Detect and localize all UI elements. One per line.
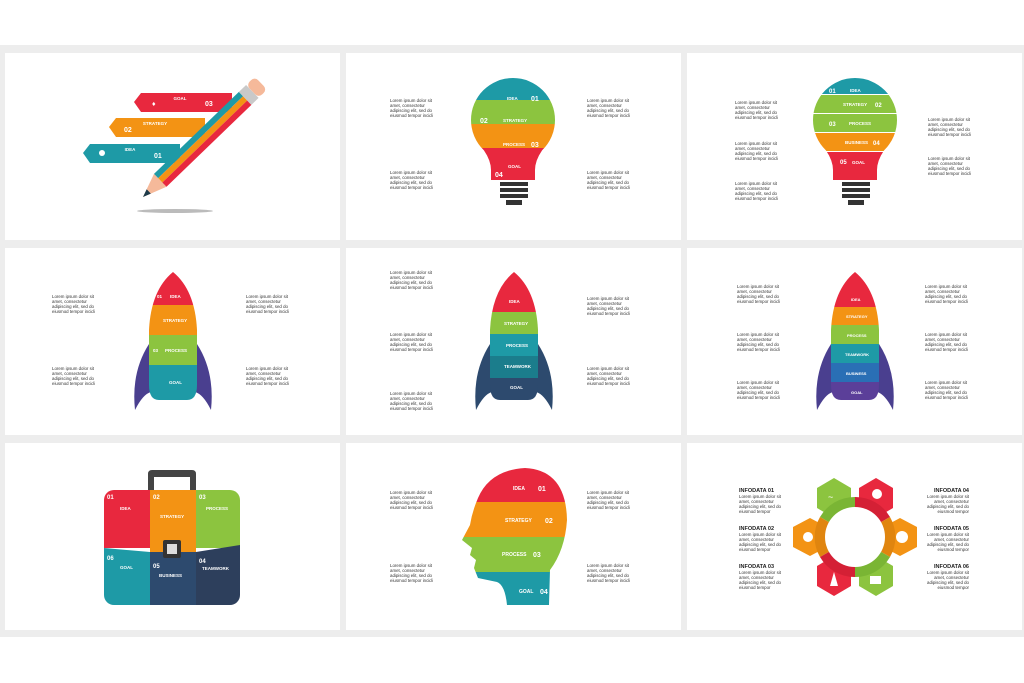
panel: gear: Lorem ipsum dolor sit <box>927 494 969 499</box>
panel: gear: amet, consectetur <box>934 575 970 580</box>
panel: rocket 4: amet, consectetur <box>246 371 281 376</box>
panel: rocket 6: adipiscing elit, sed do <box>925 390 968 395</box>
head: STRATEGY <box>505 518 533 524</box>
rocket: PROCESS <box>165 348 187 353</box>
panel: rocket 4: eiusmod tempor incidi <box>52 309 95 314</box>
panel: rocket 6: Lorem ipsum dolor sit <box>925 284 967 289</box>
panel: head: Lorem ipsum dolor sit <box>390 490 432 495</box>
bulb: 02 <box>480 118 488 125</box>
panel: head: Lorem ipsum dolor sit <box>587 563 629 568</box>
briefcase: 05 <box>153 564 160 570</box>
panel: rocket 5: adipiscing elit, sed do <box>390 342 433 347</box>
briefcase: 01 <box>107 495 114 501</box>
panel: rocket 4: amet, consectetur <box>52 299 87 304</box>
rocket: STRATEGY <box>846 314 868 319</box>
text blocks: amet, consectetur <box>587 103 622 108</box>
panel: head: eiusmod tempor incidi <box>390 578 433 583</box>
bulb: 05 <box>840 160 847 166</box>
panel: gear: INFODATA 04 <box>934 488 970 494</box>
panel: rocket 6: Lorem ipsum dolor sit <box>925 332 967 337</box>
panel: rocket 4: adipiscing elit, sed do <box>52 376 95 381</box>
head: PROCESS <box>502 552 527 558</box>
panel: rocket 5: amet, consectetur <box>587 301 622 306</box>
panel: rocket 6: amet, consectetur <box>737 337 772 342</box>
rocket: PROCESS <box>506 343 528 348</box>
text blocks: amet, consectetur <box>735 105 770 110</box>
text blocks: adipiscing elit, sed do <box>390 108 433 113</box>
panel: rocket 6: amet, consectetur <box>925 289 960 294</box>
panel: gear: eiusmod tempor <box>739 509 771 514</box>
rocket: STRATEGY <box>163 318 187 323</box>
briefcase: GOAL <box>120 565 133 570</box>
panel: rocket 6: adipiscing elit, sed do <box>737 390 780 395</box>
panel: gear: INFODATA 06 <box>934 564 969 570</box>
rocket: TEAMWORK <box>504 364 532 369</box>
rocket <box>816 272 894 410</box>
panel: gear: adipiscing elit, sed do <box>927 542 970 547</box>
panel: gear: eiusmod tempor <box>938 585 970 590</box>
panel: rocket 5: amet, consectetur <box>390 275 425 280</box>
panel: gear: INFODATA 05 <box>934 526 969 532</box>
panel: rocket 5: amet, consectetur <box>587 371 622 376</box>
text blocks <box>390 98 630 190</box>
panel: gear: INFODATA 02 <box>739 526 774 532</box>
text blocks: adipiscing elit, sed do <box>735 151 778 156</box>
panel: head: adipiscing elit, sed do <box>390 573 433 578</box>
panel: gear: amet, consectetur <box>739 575 774 580</box>
briefcase: 04 <box>199 559 206 565</box>
panel: rocket 4: Lorem ipsum dolor sit <box>52 366 94 371</box>
panel: head: eiusmod tempor incidi <box>587 505 630 510</box>
panel: gear: Lorem ipsum dolor sit <box>739 494 781 499</box>
panel: rocket 6: amet, consectetur <box>925 337 960 342</box>
panel: rocket 5: adipiscing elit, sed do <box>390 401 433 406</box>
head: GOAL <box>519 589 533 595</box>
rocket: GOAL <box>169 380 182 385</box>
bulb: GOAL <box>508 164 521 169</box>
briefcase: 03 <box>199 495 206 501</box>
panel: pencil <box>5 53 340 240</box>
panel: gear: Lorem ipsum dolor sit <box>739 570 781 575</box>
panel: rocket 6: adipiscing elit, sed do <box>737 294 780 299</box>
rocket: IDEA <box>509 299 521 304</box>
panel: rocket 5: Lorem ipsum dolor sit <box>390 332 432 337</box>
head: 02 <box>545 518 553 525</box>
panel: rocket 6: Lorem ipsum dolor sit <box>737 380 779 385</box>
panel: rocket 6: amet, consectetur <box>737 385 772 390</box>
text blocks: amet, consectetur <box>587 175 622 180</box>
panel: rocket 6: Lorem ipsum dolor sit <box>925 380 967 385</box>
bulb: 01 <box>829 89 836 95</box>
panel: gear <box>687 443 1022 630</box>
panel: gear: INFODATA 01 <box>739 488 774 494</box>
text blocks: amet, consectetur <box>390 103 425 108</box>
panel: gear: adipiscing elit, sed do <box>739 504 782 509</box>
bulb: 04 <box>873 141 880 147</box>
panel: gear: eiusmod tempor <box>938 509 970 514</box>
text blocks: eiusmod tempor incidi <box>390 185 433 190</box>
banner: strategy: 02 <box>124 127 132 134</box>
panel: gear: Lorem ipsum dolor sit <box>927 532 969 537</box>
bulb: GOAL <box>852 160 865 165</box>
panel: rocket 4: adipiscing elit, sed do <box>246 304 289 309</box>
briefcase: STRATEGY <box>160 514 184 519</box>
panel: rocket 6: adipiscing elit, sed do <box>925 342 968 347</box>
text blocks: eiusmod tempor incidi <box>587 185 630 190</box>
banner: goal: ♦ <box>152 101 156 108</box>
panel: rocket 5: Lorem ipsum dolor sit <box>390 391 432 396</box>
briefcase: 06 <box>107 556 114 562</box>
panel: rocket 4: eiusmod tempor incidi <box>246 381 289 386</box>
panel: rocket 6: amet, consectetur <box>737 289 772 294</box>
panel: gear: amet, consectetur <box>739 499 774 504</box>
text blocks: Lorem ipsum dolor sit <box>735 100 777 105</box>
panel: gear: amet, consectetur <box>934 499 970 504</box>
bulb: BUSINESS <box>845 140 868 145</box>
panel: rocket 5: amet, consectetur <box>390 396 425 401</box>
gear: ~ <box>828 492 833 502</box>
text blocks: Lorem ipsum dolor sit <box>390 170 432 175</box>
panel: rocket 4 <box>5 248 340 435</box>
panel: rocket 6: eiusmod tempor incidi <box>737 299 780 304</box>
panel: rocket 5: adipiscing elit, sed do <box>390 280 433 285</box>
panel: rocket 6: Lorem ipsum dolor sit <box>737 284 779 289</box>
panel: rocket 5: eiusmod tempor incidi <box>390 285 433 290</box>
panel: rocket 5: adipiscing elit, sed do <box>587 306 630 311</box>
rocket: IDEA <box>851 297 861 302</box>
bulb: 01 <box>531 96 539 103</box>
panel: rocket 5: eiusmod tempor incidi <box>390 347 433 352</box>
panel: rocket 5: eiusmod tempor incidi <box>587 311 630 316</box>
panel: bulb 5 <box>687 53 1022 240</box>
text blocks: adipiscing elit, sed do <box>587 180 630 185</box>
text blocks: Lorem ipsum dolor sit <box>390 98 432 103</box>
text blocks: Lorem ipsum dolor sit <box>735 181 777 186</box>
panel: bulb 4 <box>346 53 681 240</box>
text blocks: Lorem ipsum dolor sit <box>587 170 629 175</box>
bulb: 04 <box>495 172 503 179</box>
text blocks: Lorem ipsum dolor sit <box>928 117 970 122</box>
rocket: STRATEGY <box>504 321 528 326</box>
briefcase: IDEA <box>120 506 132 511</box>
panel: rocket 4: Lorem ipsum dolor sit <box>246 294 288 299</box>
pencil <box>137 77 267 203</box>
head: 04 <box>540 589 548 596</box>
head: 01 <box>538 486 546 493</box>
text blocks: Lorem ipsum dolor sit <box>587 98 629 103</box>
rocket: BUSINESS <box>846 371 867 376</box>
bulb: 02 <box>875 103 882 109</box>
panel: gear: Lorem ipsum dolor sit <box>739 532 781 537</box>
panel: head: adipiscing elit, sed do <box>587 573 630 578</box>
panel: rocket 6: adipiscing elit, sed do <box>925 294 968 299</box>
rocket: GOAL <box>851 390 863 395</box>
panel: gear: Lorem ipsum dolor sit <box>927 570 969 575</box>
panel: rocket 6: eiusmod tempor incidi <box>737 347 780 352</box>
text blocks: eiusmod tempor incidi <box>735 156 778 161</box>
banner: goal <box>134 93 232 112</box>
text blocks: eiusmod tempor incidi <box>928 171 971 176</box>
banner: strategy <box>109 118 205 137</box>
briefcase: BUSINESS <box>159 573 182 578</box>
panel: gear: adipiscing elit, sed do <box>739 580 782 585</box>
banner: idea <box>83 144 180 163</box>
panel: rocket 6: eiusmod tempor incidi <box>925 299 968 304</box>
panel: rocket 5 <box>346 248 681 435</box>
panel: head: amet, consectetur <box>587 495 622 500</box>
text blocks: adipiscing elit, sed do <box>390 180 433 185</box>
panel: rocket 4: adipiscing elit, sed do <box>52 304 95 309</box>
panel: rocket 6: eiusmod tempor incidi <box>737 395 780 400</box>
panel: rocket 5: adipiscing elit, sed do <box>587 376 630 381</box>
panel: rocket 4: eiusmod tempor incidi <box>52 381 95 386</box>
panel: gear: adipiscing elit, sed do <box>927 504 970 509</box>
panel: head: amet, consectetur <box>390 568 425 573</box>
banner: goal: GOAL <box>174 96 187 101</box>
text blocks: adipiscing elit, sed do <box>928 127 971 132</box>
banner: goal: 03 <box>205 101 213 108</box>
head: 03 <box>533 552 541 559</box>
panel: gear: amet, consectetur <box>934 537 970 542</box>
panel: head: eiusmod tempor incidi <box>390 505 433 510</box>
rocket: IDEA <box>170 294 182 299</box>
panel: head: amet, consectetur <box>390 495 425 500</box>
panel: head: amet, consectetur <box>587 568 622 573</box>
panel: briefcase <box>5 443 340 630</box>
rocket: GOAL <box>510 385 523 390</box>
text blocks: amet, consectetur <box>390 175 425 180</box>
briefcase: PROCESS <box>206 506 228 511</box>
text blocks: adipiscing elit, sed do <box>928 166 971 171</box>
panel: gear: amet, consectetur <box>739 537 774 542</box>
panel: gear: INFODATA 03 <box>739 564 774 570</box>
bulb <box>471 78 555 205</box>
panel: rocket 4: amet, consectetur <box>52 371 87 376</box>
panel: rocket 6 <box>687 248 1022 435</box>
banner: idea: IDEA <box>125 147 136 152</box>
panel: head <box>346 443 681 630</box>
panel: rocket 6: adipiscing elit, sed do <box>737 342 780 347</box>
rocket: 01 <box>157 294 163 299</box>
briefcase <box>104 470 240 605</box>
panel: rocket 5: Lorem ipsum dolor sit <box>587 366 629 371</box>
panel: head: adipiscing elit, sed do <box>587 500 630 505</box>
panel: rocket 6: eiusmod tempor incidi <box>925 395 968 400</box>
panel: rocket 4: amet, consectetur <box>246 299 281 304</box>
text blocks: adipiscing elit, sed do <box>587 108 630 113</box>
text blocks: amet, consectetur <box>928 122 963 127</box>
text blocks: Lorem ipsum dolor sit <box>735 141 777 146</box>
panel: rocket 5: Lorem ipsum dolor sit <box>587 296 629 301</box>
text blocks: eiusmod tempor incidi <box>390 113 433 118</box>
panel: head: Lorem ipsum dolor sit <box>587 490 629 495</box>
panel: rocket 4: Lorem ipsum dolor sit <box>52 294 94 299</box>
briefcase: TEAMWORK <box>202 566 230 571</box>
rocket: 03 <box>153 348 159 353</box>
gear <box>793 478 917 596</box>
panel: rocket 5: Lorem ipsum dolor sit <box>390 270 432 275</box>
briefcase: 02 <box>153 495 160 501</box>
bulb: 03 <box>829 122 836 128</box>
text blocks: adipiscing elit, sed do <box>735 191 778 196</box>
bulb: PROCESS <box>503 142 525 147</box>
banner: idea: 01 <box>154 153 162 160</box>
text blocks: eiusmod tempor incidi <box>587 113 630 118</box>
panel: head: eiusmod tempor incidi <box>587 578 630 583</box>
head: IDEA <box>513 486 525 492</box>
rocket <box>475 272 553 410</box>
rocket: PROCESS <box>847 333 867 338</box>
panel: rocket 4: Lorem ipsum dolor sit <box>246 366 288 371</box>
bulb: PROCESS <box>849 121 871 126</box>
panel: gear: adipiscing elit, sed do <box>927 580 970 585</box>
panel: rocket 6: Lorem ipsum dolor sit <box>737 332 779 337</box>
text blocks: eiusmod tempor incidi <box>735 196 778 201</box>
panel: gear: eiusmod tempor <box>739 585 771 590</box>
rocket: TEAMWORK <box>845 352 869 357</box>
bulb: IDEA <box>507 96 519 101</box>
panel: head: adipiscing elit, sed do <box>390 500 433 505</box>
bulb: STRATEGY <box>503 118 527 123</box>
bulb: 03 <box>531 142 539 149</box>
text blocks: Lorem ipsum dolor sit <box>928 156 970 161</box>
text blocks: amet, consectetur <box>735 146 770 151</box>
panel: rocket 4: eiusmod tempor incidi <box>246 309 289 314</box>
panel: gear: eiusmod tempor <box>938 547 970 552</box>
panel: rocket 6: eiusmod tempor incidi <box>925 347 968 352</box>
text blocks: amet, consectetur <box>735 186 770 191</box>
panel: rocket 4: adipiscing elit, sed do <box>246 376 289 381</box>
rocket <box>134 272 212 410</box>
head <box>462 468 567 605</box>
bulb: STRATEGY <box>843 102 867 107</box>
panel: rocket 5: eiusmod tempor incidi <box>587 381 630 386</box>
panel: gear: adipiscing elit, sed do <box>739 542 782 547</box>
text blocks: eiusmod tempor incidi <box>928 132 971 137</box>
text blocks: adipiscing elit, sed do <box>735 110 778 115</box>
banner: strategy: STRATEGY <box>143 121 167 126</box>
text blocks <box>735 100 971 201</box>
bulb <box>813 78 897 205</box>
text blocks: amet, consectetur <box>928 161 963 166</box>
text blocks: eiusmod tempor incidi <box>735 115 778 120</box>
panel: head: Lorem ipsum dolor sit <box>390 563 432 568</box>
bulb: IDEA <box>850 88 862 93</box>
panel: rocket 6: amet, consectetur <box>925 385 960 390</box>
panel: gear: eiusmod tempor <box>739 547 771 552</box>
panel: rocket 5: eiusmod tempor incidi <box>390 406 433 411</box>
panel: rocket 5: amet, consectetur <box>390 337 425 342</box>
